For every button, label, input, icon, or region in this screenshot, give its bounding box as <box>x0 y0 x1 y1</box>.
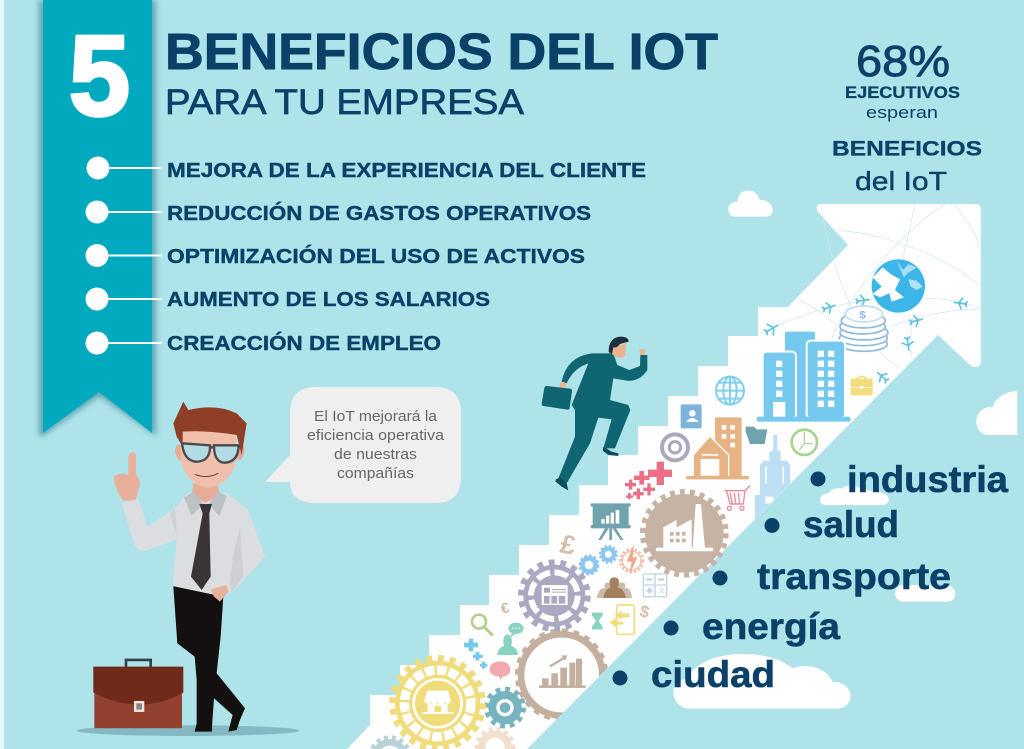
benefits list <box>86 156 646 355</box>
runner with briefcase <box>542 337 647 490</box>
icon: presentation board <box>591 503 631 540</box>
statistic: 68%: BENEFICIOS <box>832 136 982 160</box>
statistic: 68% <box>832 37 982 196</box>
speech bubble: de nuestras <box>334 447 417 463</box>
icon: purple gear <box>521 562 588 629</box>
icon: dollar: $ <box>638 601 652 622</box>
icon: hourglass <box>592 613 603 629</box>
icon: globe <box>872 259 925 313</box>
sector: salud: salud <box>803 504 899 545</box>
icon: calculator <box>643 574 667 597</box>
icon: coins <box>839 306 888 351</box>
runner briefcase <box>542 386 572 410</box>
trousers <box>173 586 245 732</box>
runner legs and jacket <box>558 353 647 483</box>
icon: blue gears <box>580 546 616 574</box>
tie <box>191 504 212 590</box>
icon: chat person <box>497 623 524 655</box>
icon: phone with arrows <box>609 605 634 634</box>
route lines <box>758 203 981 368</box>
staircase icons, lower group <box>370 562 654 749</box>
title <box>165 23 718 122</box>
speech bubble: compañías <box>337 466 414 482</box>
face <box>181 427 237 487</box>
cloud: behind industria <box>820 486 889 505</box>
icon: people <box>597 577 632 598</box>
man pointing up <box>76 402 300 736</box>
pointing hand <box>114 452 140 501</box>
cloud: behind ciudad <box>673 654 851 709</box>
benefit 5: CREACCIÓN DE EMPLEO <box>167 331 441 355</box>
icon: calculator small <box>644 574 654 596</box>
shirt <box>122 493 265 597</box>
big number 5: 5 <box>69 13 130 140</box>
statistic: 68%: esperan <box>866 104 938 122</box>
statistic: 68%: EJECUTIVOS <box>845 83 960 102</box>
banner ribbon <box>39 0 156 436</box>
icon: pink speech bubble <box>490 661 510 680</box>
runner shoes <box>555 447 618 490</box>
icon: energy gear <box>620 544 643 575</box>
cloud: behind transporte <box>895 585 955 602</box>
icon: pound sign: £ <box>557 529 578 561</box>
speech bubble <box>265 387 461 503</box>
icon: pale blue gear <box>370 737 410 749</box>
icon: pale peach gear <box>477 729 513 749</box>
cloud: right <box>976 391 1017 435</box>
icon: web globe <box>716 377 744 405</box>
benefit 2: REDUCCIÓN DE GASTOS OPERATIVOS <box>167 201 591 225</box>
sector: ciudad: ciudad <box>651 654 775 695</box>
icon: target <box>662 434 688 460</box>
icon: teal gear <box>487 690 523 726</box>
statistic: 68%: 68% <box>856 37 950 86</box>
floor shadow <box>76 725 300 736</box>
hair <box>173 402 247 455</box>
icon: contact book <box>681 404 702 428</box>
icon: factory gear <box>643 492 726 575</box>
icon: clock <box>792 430 817 455</box>
sector: industria: industria <box>847 459 1008 500</box>
neck <box>192 483 220 503</box>
statistic: 68%: del IoT <box>855 166 947 196</box>
icon: euro: € <box>500 600 511 618</box>
pocket hand <box>211 585 228 602</box>
ears <box>175 445 244 461</box>
sleeve shading <box>170 508 243 593</box>
map lines and planes <box>758 203 981 385</box>
icon: coins: $ <box>859 310 866 322</box>
icon: yellow briefcase <box>851 376 873 395</box>
sector: energía: energía <box>702 606 840 647</box>
icon: shopping cart <box>724 486 750 510</box>
icon: magnifier <box>472 615 492 635</box>
icon: shop gear <box>393 658 483 748</box>
runner hands <box>559 349 646 388</box>
skyscraper silhouette <box>755 435 790 520</box>
benefit 1: MEJORA DE LA EXPERIENCIA DEL CLIENTE <box>167 159 646 182</box>
icon: blue pluses <box>464 639 487 669</box>
sectors list <box>612 459 1008 695</box>
icon: pluses <box>625 462 672 499</box>
smile <box>195 473 218 477</box>
staircase arrow <box>347 204 981 749</box>
benefit 3: OPTIMIZACIÓN DEL USO DE ACTIVOS <box>167 244 585 268</box>
planes <box>763 294 968 385</box>
icon: folder <box>746 427 767 444</box>
icon: chart gear <box>518 631 605 719</box>
icon: office buildings <box>757 332 851 422</box>
benefit 5 <box>86 331 441 355</box>
title: BENEFICIOS DEL IOT <box>165 23 718 80</box>
globe and coins <box>757 259 925 422</box>
briefcase <box>93 660 183 728</box>
icon: warehouse and tower <box>686 417 749 479</box>
cloud: top <box>728 191 773 217</box>
collar <box>184 492 227 516</box>
title: PARA TU EMPRESA <box>165 83 525 122</box>
glasses <box>182 443 239 463</box>
sector: transporte: transporte <box>757 556 951 597</box>
speech bubble: El IoT mejorará la <box>314 409 438 425</box>
speech bubble: eficiencia operativa <box>307 428 445 444</box>
runner head <box>609 337 629 358</box>
staircase icons, upper group <box>557 377 767 575</box>
benefit 4: AUMENTO DE LOS SALARIOS <box>167 288 490 311</box>
